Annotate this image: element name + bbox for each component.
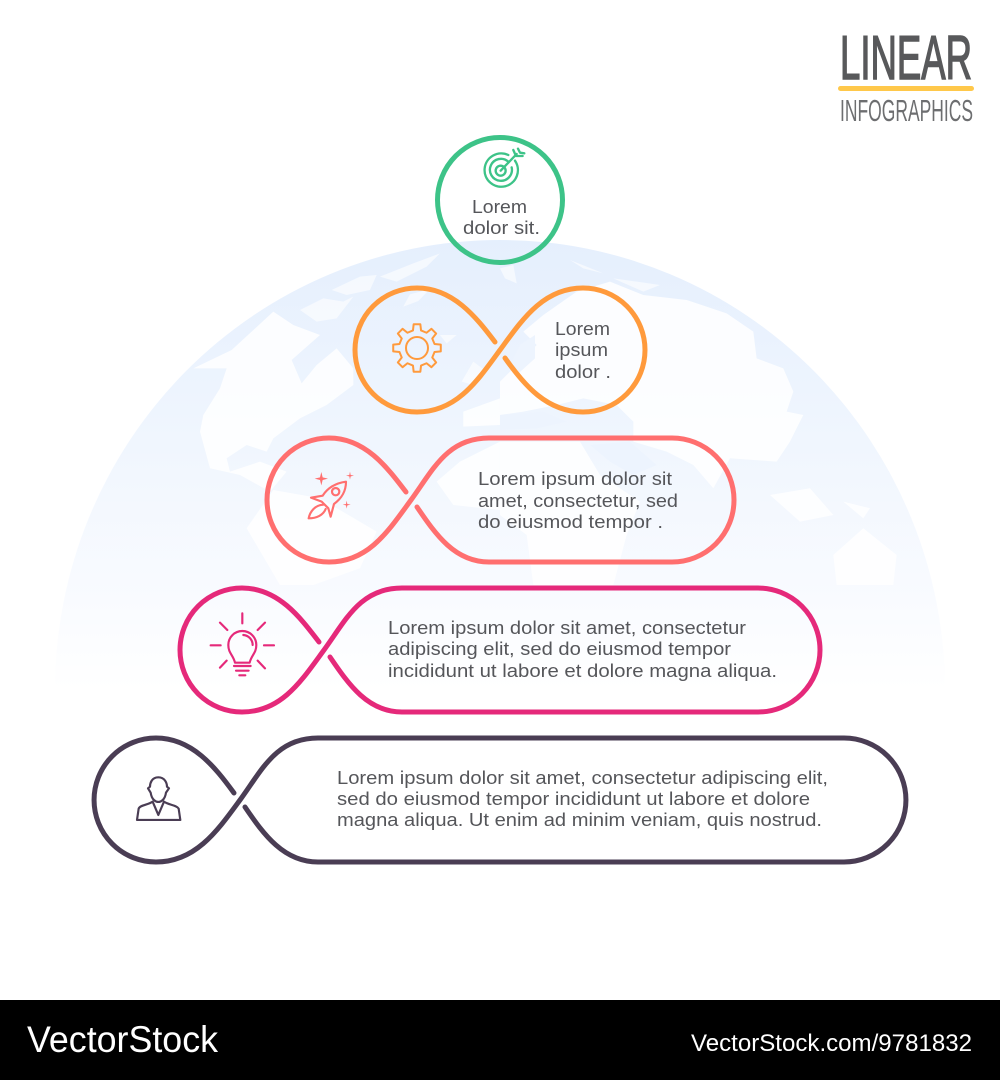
text: step 4: adipiscing elit, sed do eiusmod tempor — [388, 638, 731, 659]
text: step 4 — [388, 617, 777, 681]
icon: target — [485, 149, 524, 187]
icon: rocket — [309, 472, 354, 518]
text: step 4: Lorem ipsum dolor sit amet, consectetur — [388, 617, 746, 638]
background globe — [55, 240, 945, 690]
icon: gear — [393, 324, 441, 372]
text: step 1: dolor sit. — [463, 217, 540, 238]
logo — [838, 24, 974, 128]
logo underline — [838, 86, 974, 91]
footer bar — [0, 1000, 1000, 1080]
step 3: coral infinity — [267, 438, 734, 562]
text: step 5 — [337, 767, 828, 830]
step 1: green circle — [438, 138, 562, 262]
text: step 4: incididunt ut labore et dolore magna aliqua. — [388, 660, 777, 681]
text: step 2 — [555, 318, 611, 382]
text: step 2: Lorem — [555, 318, 610, 339]
step 2: orange infinity — [355, 288, 645, 412]
text: step 1: Lorem — [472, 196, 527, 217]
footer brand: VectorStock — [27, 1019, 218, 1060]
text: step 2: ipsum — [555, 339, 608, 360]
step 4: pink infinity — [180, 588, 820, 712]
text: step 5: sed do eiusmod tempor incididunt ut labore et dolore — [337, 788, 810, 809]
text: step 2: dolor . — [555, 361, 611, 382]
step 5: dark infinity — [94, 738, 906, 862]
text: step 3: Lorem ipsum dolor sit — [478, 468, 672, 489]
text: step 3: amet, consectetur, sed — [478, 490, 678, 511]
text: step 3 — [478, 468, 678, 532]
text: step 3: do eiusmod tempor . — [478, 511, 663, 532]
icon: person — [137, 777, 180, 820]
text: step 5: magna aliqua. Ut enim ad minim veniam, quis nostrud. — [337, 809, 822, 830]
text: step 5: Lorem ipsum dolor sit amet, consectetur adipiscing elit, — [337, 767, 828, 788]
icon: light bulb — [211, 613, 274, 675]
footer url: VectorStock.com/9781832 — [691, 1030, 972, 1057]
text: step 1 — [463, 196, 540, 238]
